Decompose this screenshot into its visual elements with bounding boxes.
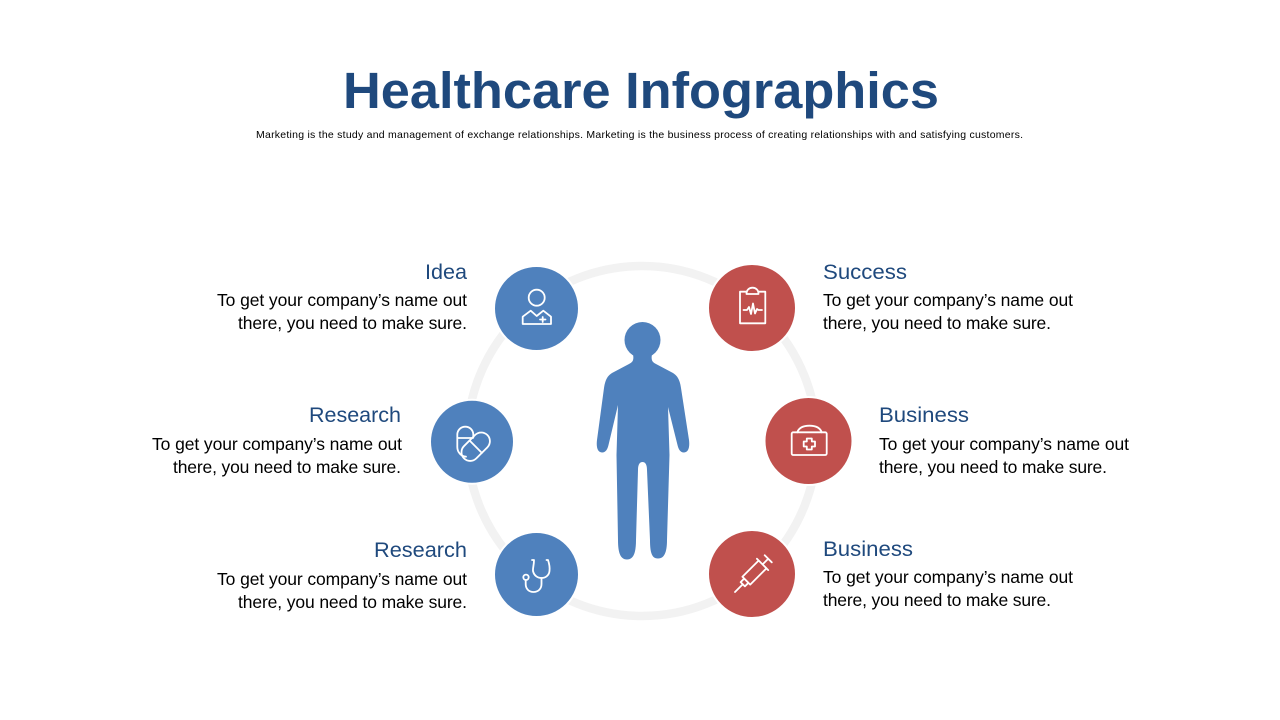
text block: Research <box>152 434 402 477</box>
text block: Idea: To get your company’s name out <box>217 290 467 310</box>
text block: Business <box>879 434 1129 477</box>
text block: Business: To get your company’s name out <box>879 434 1129 454</box>
icon: stethoscope <box>494 532 579 617</box>
text block: Research <box>217 569 467 612</box>
title: Healthcare Infographics <box>343 62 939 119</box>
node: Business bag <box>764 397 1129 485</box>
text block: Business: To get your company’s name out <box>823 567 1073 587</box>
text block: Research: there, you need to make sure. <box>238 592 467 612</box>
node: Idea <box>217 261 579 351</box>
ring <box>467 266 817 616</box>
heading: Business: Business <box>879 404 969 427</box>
text block: Success <box>823 290 1073 333</box>
text block: Success: To get your company’s name out <box>823 290 1073 310</box>
text block: Research: To get your company’s name out <box>152 434 402 454</box>
icon: medical bag <box>764 397 852 485</box>
text block: Business <box>823 567 1073 610</box>
heading: Research: Research <box>309 404 401 427</box>
node: Research stethoscope <box>217 532 579 617</box>
node: Success <box>708 261 1073 352</box>
node: Business syringe <box>708 530 1073 618</box>
icon: clipboard <box>708 264 796 352</box>
text block: Business: there, you need to make sure. <box>823 590 1051 610</box>
text block: Idea: there, you need to make sure. <box>238 313 467 333</box>
text block: Success: there, you need to make sure. <box>823 313 1051 333</box>
text block: Business: there, you need to make sure. <box>879 457 1107 477</box>
text block: Research: To get your company’s name out <box>217 569 467 589</box>
heading: Business: Business <box>823 538 913 561</box>
human figure <box>597 322 689 560</box>
node: Research pills <box>152 400 514 484</box>
icon: pills <box>430 400 514 484</box>
subtitle: Marketing is the study and management of exchange relationships. Marketing is the business process of creating relationships with and satisfying customers. <box>256 129 1023 141</box>
icon: doctor <box>494 266 579 351</box>
text block: Idea <box>217 290 467 333</box>
icon: syringe <box>708 530 796 618</box>
text block: Research: there, you need to make sure. <box>173 457 401 477</box>
heading: Success: Success <box>823 261 907 284</box>
heading: Idea: Idea <box>425 261 467 284</box>
heading: Research: Research <box>374 539 467 562</box>
